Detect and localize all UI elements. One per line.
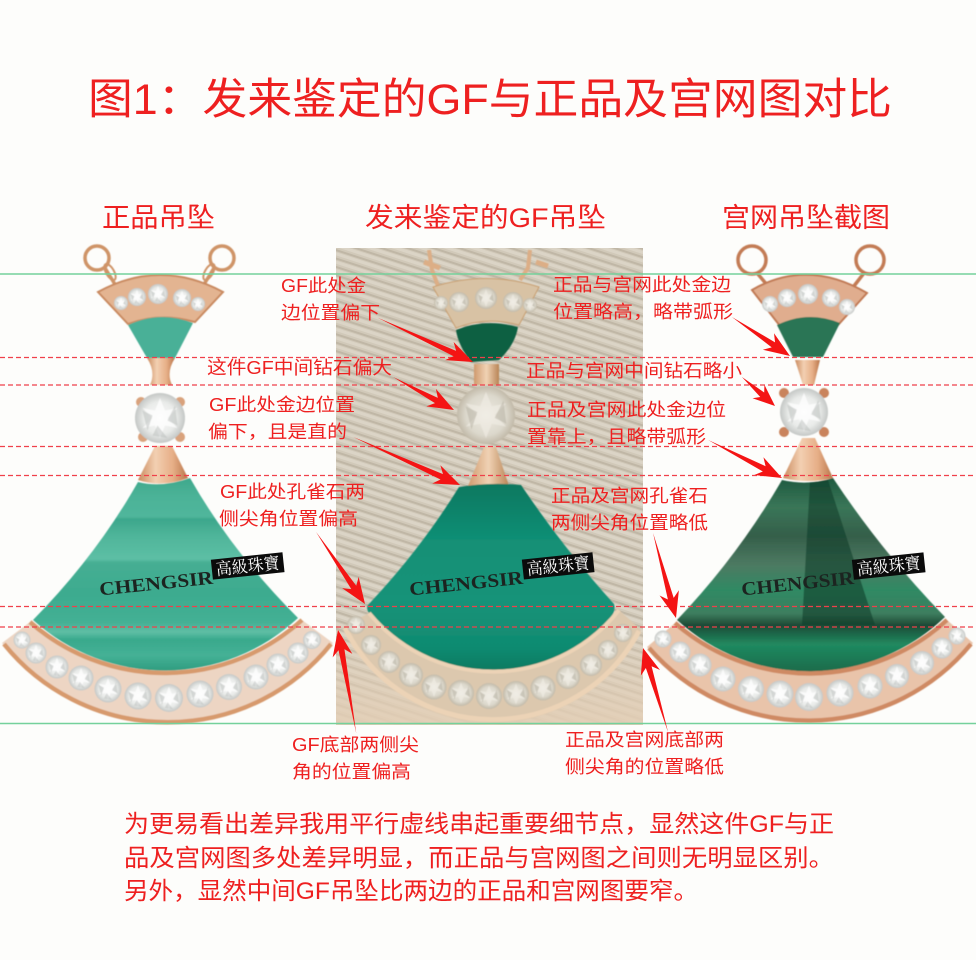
arrow: GF malachite corner xyxy=(308,526,373,610)
annotation: bottom corners, GF: GF底部两侧尖 xyxy=(292,735,419,755)
conclusion text: 品及宫网图多处差异明显，而正品与宫网图之间则无明显区别。 xyxy=(124,845,834,872)
gold diamond band xyxy=(343,610,641,723)
conclusion text: 为更易看出差异我用平行虚线串起重要细节点，显然这件GF与正 xyxy=(124,811,834,838)
gold cone xyxy=(783,438,833,481)
conclusion text: 另外，显然中间GF吊坠比两边的正品和宫网图要窄。 xyxy=(124,878,698,905)
gold neck xyxy=(795,360,820,385)
band diamonds xyxy=(347,616,632,709)
annotation: malachite corners, GF: 侧尖角位置偏高 xyxy=(219,509,358,529)
large malachite xyxy=(33,478,298,671)
arrow: GF upper edge xyxy=(374,309,477,371)
band diamonds xyxy=(654,628,966,711)
annotation: bottom corners, genuine: 侧尖角的位置略低 xyxy=(565,757,724,777)
top fan gold frame xyxy=(98,275,223,324)
gold cone xyxy=(468,447,509,486)
center diamond xyxy=(135,393,185,443)
watermark: left xyxy=(97,552,285,601)
annotation: lower gold edge, genuine: 置靠上，且略带弧形 xyxy=(527,427,706,447)
top malachite xyxy=(128,317,193,358)
dark center facet xyxy=(802,480,875,625)
band rims xyxy=(649,620,971,721)
arrow: GF bottom corner xyxy=(328,628,366,735)
gold neck xyxy=(147,358,175,385)
top fan diamonds xyxy=(762,284,855,315)
arrow: genuine lower edge xyxy=(704,431,787,487)
top malachite xyxy=(777,317,840,357)
watermark: center xyxy=(407,552,595,601)
annotation: upper gold edge, GF xyxy=(281,276,380,323)
annotation: malachite corners, genuine: 正品及宫网孔雀石 xyxy=(551,486,708,506)
green guide lines xyxy=(0,274,976,724)
band diamonds xyxy=(14,631,321,712)
annotation: malachite corners, GF: GF此处孔雀石两 xyxy=(220,482,365,502)
heading: GF pendant: 发来鉴定的GF吊坠 xyxy=(365,203,606,233)
annotation: center diamond, GF: 这件GF中间钻石偏大 xyxy=(207,358,392,378)
pendant: official website xyxy=(647,246,973,722)
annotation: center diamond, genuine: 正品与宫网中间钻石略小 xyxy=(526,361,742,381)
annotation: bottom corners, genuine: 正品及宫网底部两 xyxy=(565,730,724,750)
necklace chain xyxy=(424,250,548,286)
band rims xyxy=(345,610,639,720)
watermark: center: CHENGSIR xyxy=(408,568,524,601)
arrow: GF diamond xyxy=(389,368,459,419)
annotation: upper gold edge, GF: 边位置偏下 xyxy=(281,303,380,323)
arrow: GF lower edge xyxy=(349,428,464,494)
arrow: genuine malachite corner xyxy=(643,530,686,621)
watermark: left: CHENGSIR xyxy=(98,568,214,601)
annotation: lower gold edge, genuine: 正品及宫网此处金边位 xyxy=(527,400,726,420)
watermark: center: 高級珠寶 xyxy=(526,554,591,579)
annotation: lower gold edge, GF: 偏下，且是直的 xyxy=(208,422,347,442)
annotation: bottom corners, genuine xyxy=(565,730,724,777)
top fan diamonds xyxy=(114,284,205,311)
red dashed guide lines xyxy=(0,358,976,627)
gold neck xyxy=(474,364,499,385)
gold cone xyxy=(138,446,188,484)
annotation: lower gold edge, GF: GF此处金边位置 xyxy=(209,395,355,415)
annotation: bottom corners, GF: 角的位置偏高 xyxy=(292,762,411,782)
center diamond xyxy=(779,388,829,437)
annotation: bottom corners, GF xyxy=(292,735,419,782)
band rims xyxy=(4,620,331,722)
annotation: upper gold edge, genuine xyxy=(553,275,733,322)
necklace chain xyxy=(738,246,884,286)
gold diamond band xyxy=(647,620,973,722)
annotation: upper gold edge, GF: GF此处金 xyxy=(281,276,366,296)
pendant: GF under appraisal xyxy=(343,250,641,723)
top fan gold frame xyxy=(433,278,539,328)
annotation: malachite corners, GF xyxy=(219,482,365,529)
large malachite xyxy=(677,478,945,671)
arrow: genuine upper edge xyxy=(726,309,796,364)
annotation: upper gold edge, genuine: 正品与宫网此处金边 xyxy=(553,275,731,295)
watermark: left: 高級珠寶 xyxy=(215,554,281,579)
conclusion text xyxy=(124,811,834,905)
heading: website pendant: 宫网吊坠截图 xyxy=(722,203,890,233)
annotation: malachite corners, genuine: 两侧尖角位置略低 xyxy=(551,513,708,533)
top fan diamonds xyxy=(434,287,537,312)
pendant: genuine xyxy=(2,246,333,724)
large malachite xyxy=(367,484,614,676)
center diamond xyxy=(457,386,515,444)
annotation: lower gold edge, genuine xyxy=(527,400,726,447)
top fan gold frame xyxy=(752,275,867,326)
watermark: right: 高級珠寶 xyxy=(856,554,922,579)
panel: fabric photo background xyxy=(336,248,643,725)
watermark: right: CHENGSIR xyxy=(740,568,855,601)
gold diamond band xyxy=(2,620,333,724)
top malachite xyxy=(456,323,518,362)
watermark: right xyxy=(739,552,926,601)
title: 图1：发来鉴定的GF与正品及宫网图对比 xyxy=(88,76,892,124)
annotation: malachite corners, genuine xyxy=(551,486,708,533)
arrow: genuine bottom corner xyxy=(633,645,678,735)
arrow: genuine diamond xyxy=(736,370,781,413)
annotation: lower gold edge, GF xyxy=(208,395,355,442)
annotation: upper gold edge, genuine: 位置略高，略带弧形 xyxy=(553,302,733,322)
necklace chain xyxy=(85,246,234,286)
heading: genuine pendant: 正品吊坠 xyxy=(102,203,215,233)
